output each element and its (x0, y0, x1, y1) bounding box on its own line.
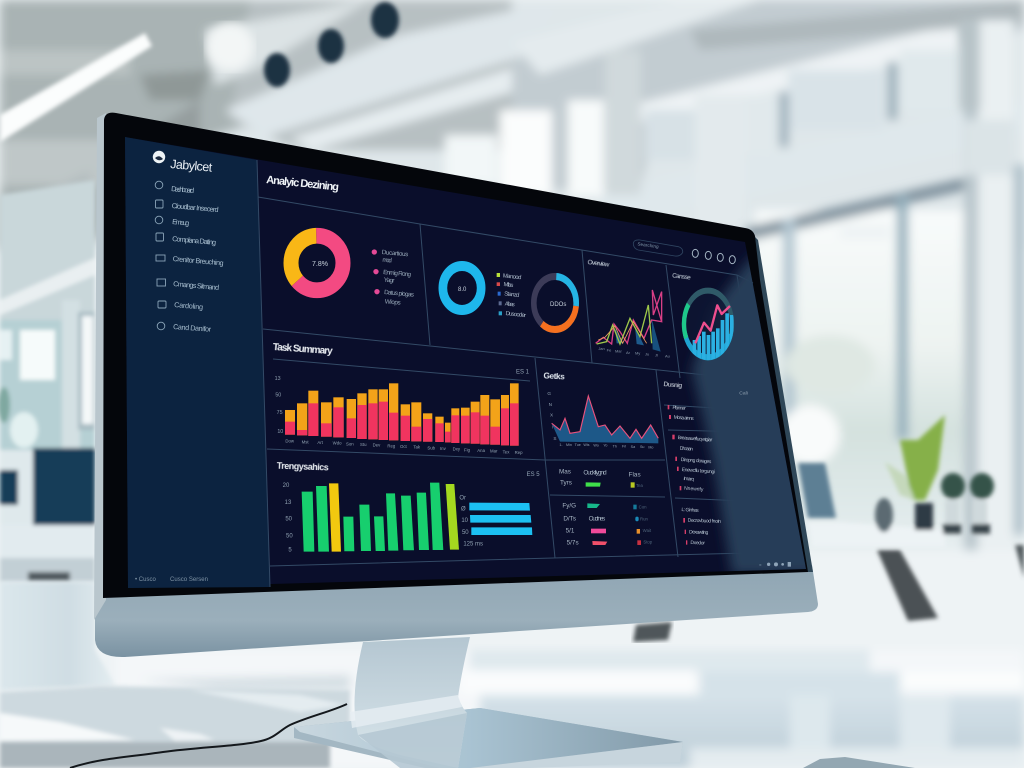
nav items: Complana Dating (172, 234, 216, 247)
side labels (459, 495, 483, 547)
legend: mod (382, 257, 393, 264)
sidebar footer: Cusco Sersen (170, 577, 208, 583)
list markers (668, 405, 687, 545)
screen: main background (125, 137, 806, 588)
panel: task summary bar chart (272, 342, 530, 455)
status pills (586, 482, 641, 545)
list title: Dusnig (663, 381, 683, 390)
table text: Fy/G (562, 503, 576, 510)
table text: Mas (559, 469, 571, 476)
side labels: Ø (461, 507, 466, 513)
x labels: Art (317, 440, 324, 445)
x labels: 1- (559, 443, 563, 447)
nav items: Emeug (172, 217, 190, 227)
secondary labels (636, 483, 653, 545)
right windows (745, 20, 1024, 550)
trend line (695, 305, 730, 343)
line chart: Mar (615, 349, 623, 354)
secondary labels: Wait (643, 528, 652, 533)
x labels: Mo (648, 446, 653, 450)
x labels: Ana (477, 448, 486, 453)
x labels: Min (566, 443, 572, 447)
donut value: DDOs (550, 302, 566, 308)
chart title: Getks (543, 370, 565, 381)
list text: Imarq (683, 476, 694, 483)
side labels: 10 (461, 518, 469, 524)
sidebar background (125, 137, 270, 588)
legend: Mltas (503, 282, 514, 289)
light fixture (0, 33, 152, 142)
panel grid lines (257, 160, 790, 587)
legend: Datus piogas (384, 289, 414, 299)
axis labels: 5 (288, 547, 292, 553)
axis labels: S (553, 436, 556, 441)
nav items: Dashboard (171, 184, 195, 195)
x labels: Reg (387, 443, 396, 448)
list text: Dxedor (690, 540, 705, 547)
nav items: Cloudbar Insecerd (171, 201, 219, 214)
secondary labels: Tea (636, 483, 644, 488)
line chart: Au (665, 354, 670, 359)
axis labels: 75 (277, 410, 283, 416)
logo and brand: Jabylcet (170, 157, 213, 175)
left office windows and monitors (0, 180, 95, 582)
chart title: Cansse (672, 272, 692, 282)
monitor stand (294, 637, 683, 768)
list text: L: Ginhas (681, 507, 699, 514)
panel: overview line chart (587, 259, 670, 359)
screen glare reflection (688, 255, 806, 571)
list text: Breasauefluq etgiar (678, 435, 713, 443)
panel: area line chart (543, 370, 658, 450)
x labels: Mar (490, 449, 498, 454)
right bezel edge (750, 232, 813, 572)
x labels: Son (346, 441, 354, 446)
chart title: Overview (587, 259, 610, 269)
silver chin (95, 565, 818, 657)
green bars (302, 483, 459, 552)
stacked bars (285, 383, 519, 446)
top-right search and icons (633, 240, 735, 264)
far desk legs (633, 622, 672, 642)
legend: Ducartious (381, 249, 409, 258)
donut chart: segmented (534, 276, 576, 330)
cable (70, 704, 347, 768)
x labels: Mst (302, 439, 309, 444)
list text: Dhoaan (680, 446, 693, 453)
line (552, 396, 658, 438)
nav items: Crenitor Breuching (172, 254, 224, 267)
axis labels (283, 483, 293, 553)
background monitor right, desk and plants (798, 415, 1024, 621)
table text: 5/7s (567, 540, 579, 547)
x labels: Yo (603, 444, 607, 448)
list text: Dexawting (689, 529, 709, 536)
sidebar (135, 151, 224, 583)
list text: Diropng clorages (681, 457, 712, 465)
axis labels: 10 (277, 429, 283, 435)
cyan bars (469, 503, 532, 535)
x labels: Fri (622, 444, 626, 448)
stand base (294, 708, 683, 768)
desk surface (0, 686, 350, 768)
list text: Mosa ainns (674, 415, 694, 422)
nav items: Cmangs Sitmand (173, 279, 219, 292)
panel: blue donuts (443, 266, 576, 330)
logo and brand (153, 151, 213, 175)
nav items (155, 181, 224, 334)
list text: Decrovbuod fnoin (688, 518, 721, 525)
legend: Manood (502, 273, 522, 281)
donut chart: blue (443, 266, 481, 310)
donut value: 7.8% (312, 261, 328, 268)
table text: Ouckfiygnd (583, 469, 607, 476)
x labels: Tue (575, 443, 581, 447)
secondary labels: Con (639, 504, 647, 509)
panel value: ES 5 (527, 472, 540, 478)
ceiling spotlights (264, 2, 399, 87)
panel value: Cali (739, 391, 748, 397)
x labels: Inv (440, 446, 447, 451)
area (552, 396, 658, 443)
black bezel (103, 113, 808, 598)
legend: Stanzd (504, 291, 520, 299)
panel value: ES 1 (516, 370, 530, 376)
panel: right list (663, 381, 748, 547)
nav items: Cardoling (174, 300, 203, 312)
side labels: Or (459, 495, 466, 501)
x labels: Sub (427, 445, 436, 450)
table text: Flas (629, 471, 641, 478)
list text: Nnewrify (684, 486, 704, 493)
list text: Planner (672, 405, 686, 412)
axis labels: 13 (275, 376, 281, 382)
x labels (559, 443, 653, 450)
x labels (285, 439, 523, 455)
x labels: Dev (373, 443, 381, 448)
silver left edge (94, 113, 106, 620)
x labels: Rep (515, 450, 523, 455)
panel: status table (559, 469, 653, 547)
x labels: Stu (360, 442, 367, 447)
toolbar icons (692, 249, 735, 264)
axis labels: X (550, 413, 554, 418)
donut chart (291, 236, 343, 290)
gauge disc (682, 288, 734, 360)
table text: 5/1 (566, 528, 575, 535)
x labels: Tak (413, 445, 421, 450)
legend: Wiops (384, 298, 401, 307)
round ceiling disc (206, 23, 254, 71)
table text: Tyrs (560, 480, 572, 487)
secondary labels: Run (640, 517, 649, 522)
stand neck (354, 637, 470, 768)
axis labels: 50 (275, 393, 281, 399)
x labels: Th (613, 444, 617, 448)
list text (672, 405, 721, 547)
x labels: Wo (593, 444, 599, 448)
table text: Ouctines (589, 516, 605, 523)
legend: Alaas (504, 301, 515, 308)
ceiling (0, 0, 1024, 250)
gauge ring (684, 291, 732, 357)
upper windows (445, 135, 497, 185)
x labels: Dxy (453, 447, 461, 452)
side labels: 125 ms (463, 541, 483, 547)
panel: pink and yellow donut (291, 236, 414, 307)
axis labels: 50 (285, 517, 293, 523)
axis labels (547, 391, 556, 441)
x labels: Tex (503, 449, 510, 454)
axis labels: 50 (286, 533, 293, 539)
line chart (596, 290, 670, 359)
mouse (803, 757, 915, 768)
sidebar footer (135, 577, 208, 583)
x labels: Wis (583, 443, 590, 447)
x labels: Su (640, 445, 644, 449)
main heading: Analyic Dezining (266, 174, 340, 194)
chair (0, 582, 115, 690)
axis labels: N (549, 402, 552, 407)
line chart: Ju (645, 351, 649, 356)
sidebar footer: • Cusco (135, 577, 156, 583)
x labels: Oct (400, 444, 408, 449)
legend: Enmig Rong (383, 269, 412, 278)
axis labels: 20 (283, 483, 290, 489)
donut value: 8.0 (458, 287, 467, 293)
axis labels (275, 376, 283, 435)
monitor body (94, 113, 820, 657)
table text (559, 469, 641, 547)
nav items: Cand Danifor (173, 322, 212, 334)
floor (115, 650, 1024, 768)
line chart: Fe (607, 348, 612, 353)
line chart: Ar (626, 350, 631, 355)
list text: Enewcflu torgungi (682, 467, 715, 475)
axis labels: N (552, 424, 555, 429)
line chart: Jan (598, 346, 605, 351)
axis labels: G (547, 391, 551, 396)
panel: radial combo chart (672, 272, 734, 363)
x labels: Dow (285, 439, 295, 444)
panel: trend graphics bar chart (277, 461, 540, 553)
x labels: Sa (631, 445, 636, 449)
chart title: Trengysahics (277, 461, 329, 472)
legend (497, 273, 526, 319)
legend (372, 249, 414, 307)
axis labels: 13 (285, 500, 292, 506)
bottom status icons (759, 562, 791, 567)
inner bars (693, 313, 734, 363)
side labels: 50 (462, 530, 469, 536)
x labels: Wdo (333, 441, 342, 446)
line chart: My (635, 351, 640, 356)
chart title: Task Summary (272, 342, 334, 357)
search box: Searching (637, 241, 659, 249)
x labels: Fig (464, 447, 471, 452)
legend: Yagr (383, 277, 395, 285)
secondary labels: Stop (643, 540, 653, 545)
legend: Dusooder (505, 311, 526, 319)
table text: D/Ts (563, 516, 576, 523)
line chart: Jl (655, 353, 658, 358)
